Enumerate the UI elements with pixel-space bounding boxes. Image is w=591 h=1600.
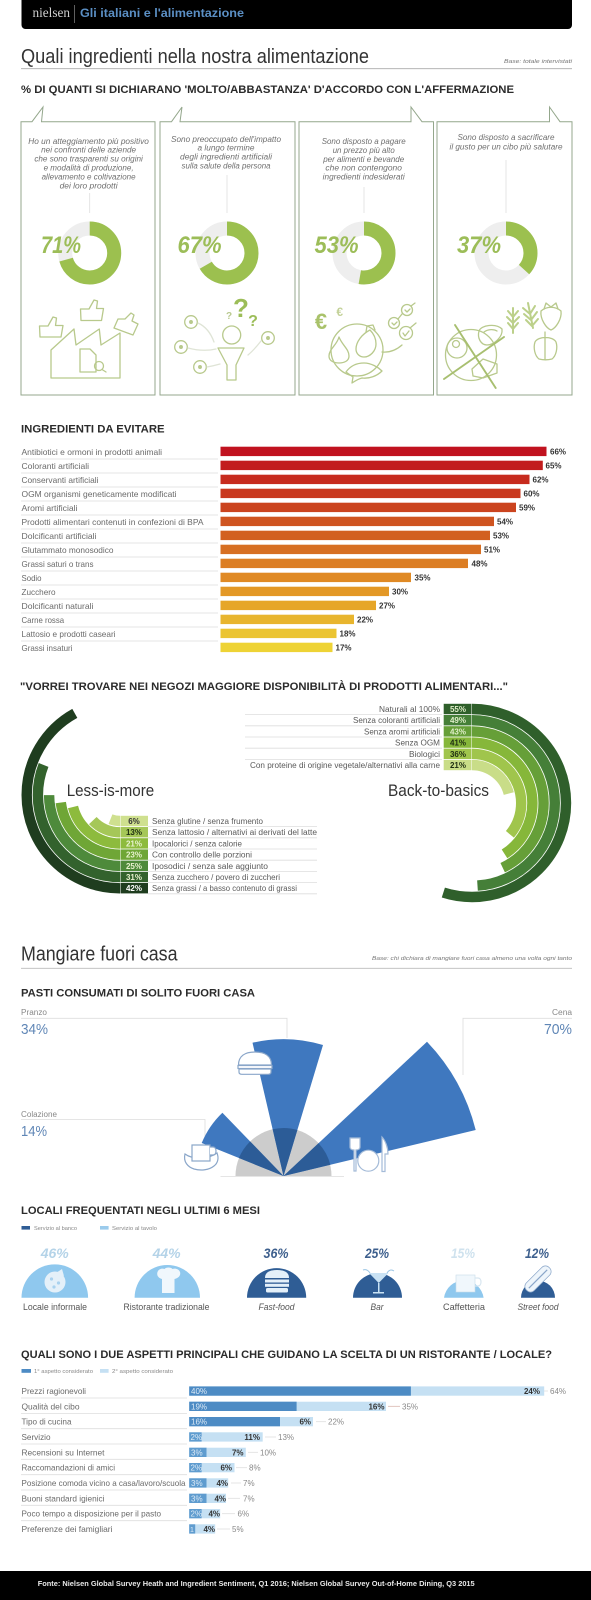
donut 53%	[314, 228, 388, 278]
bar chart: ingredients to avoid: 17%	[336, 644, 352, 652]
stacked bar chart: aspects: 16%	[368, 1402, 384, 1411]
rows: less-is-more values and labels: Senza grassi / a basso contenuto di grassi	[152, 884, 297, 893]
icon: factory with thumbs up	[40, 300, 138, 378]
icon: person with questions	[175, 316, 274, 380]
panel: worried about artificial ingredients 67%: sulla salute della persona	[182, 162, 271, 170]
stacked bar chart: aspects: 11%	[244, 1433, 260, 1442]
stacked bar chart: aspects: 7%	[243, 1494, 255, 1503]
stacked bar chart: aspects: 64%	[550, 1387, 566, 1396]
venue: ristorante tradizionale: Ristorante tradizionale	[124, 1302, 210, 1312]
bar chart: ingredients to avoid: 27%	[379, 602, 395, 610]
rows: back-to-basics values and labels: Naturali al 100%	[379, 705, 440, 714]
bar chart: ingredients to avoid: 59%	[519, 504, 535, 512]
bar chart: ingredients to avoid: Grassi saturi o trans	[22, 559, 94, 569]
rows: back-to-basics values and labels: Senza coloranti artificiali	[353, 716, 440, 725]
panel: pay higher price 53%: ingredienti indesiderati	[323, 172, 405, 182]
bar chart: ingredients to avoid: Sodio	[22, 573, 42, 583]
venue: locale informale	[22, 1245, 88, 1312]
rows: less-is-more values and labels: Ipocalorici / senza calorie	[152, 839, 243, 848]
icon: plate and cutlery	[350, 1137, 388, 1172]
venue: street food: 12%	[525, 1245, 549, 1261]
rows: back-to-basics values and labels: 36%	[450, 750, 466, 759]
stacked bar chart: aspects: Qualità del cibo	[22, 1401, 80, 1411]
callout: colazione: Colazione	[21, 1110, 58, 1119]
venue: fast-food	[247, 1245, 306, 1312]
title: eating out: Mangiare fuori casa	[21, 944, 178, 966]
bar chart: ingredients to avoid: 62%	[532, 476, 549, 484]
icon: cup	[456, 1275, 481, 1292]
stacked bar chart: aspects: Prezzi ragionevoli	[22, 1386, 86, 1396]
callout: cena: 70%	[544, 1021, 572, 1038]
panel: sacrifice taste 37%	[437, 107, 572, 395]
bar chart: ingredients to avoid: 66%	[550, 448, 566, 456]
panel: sacrifice taste 37%: il gusto per un cibo più salutare	[450, 142, 563, 152]
venue: fast-food: Fast-food	[258, 1302, 295, 1312]
callout: colazione	[21, 1110, 205, 1140]
bar chart: ingredients to avoid: 30%	[392, 588, 408, 596]
bar chart: ingredients to avoid: Prodotti alimentari contenuti in confezioni di BPA	[22, 517, 204, 527]
bar chart: ingredients to avoid: Antibiotici e ormoni in prodotti animali	[22, 447, 162, 457]
icon: crossed unhealthy food and vegetables	[444, 303, 561, 388]
panel: worried about artificial ingredients 67%: Sono preoccupato dell'impatto	[171, 135, 282, 144]
bar chart: ingredients to avoid: 22%	[357, 616, 373, 624]
stacked bar chart: aspects: 3%	[191, 1479, 203, 1488]
callout: pranzo: Pranzo	[21, 1008, 48, 1017]
stacked bar chart: aspects	[21, 1386, 566, 1534]
venue: street food: Street food	[518, 1302, 559, 1312]
stacked bar chart: aspects: 24%	[524, 1387, 540, 1396]
venue: bar: Bar	[370, 1302, 384, 1312]
stacked bar chart: aspects: Recensioni su Internet	[22, 1447, 105, 1457]
rows: back-to-basics values and labels: Senza aromi artificiali	[364, 727, 440, 736]
bar chart: ingredients to avoid: 51%	[484, 546, 500, 554]
bar chart: ingredients to avoid: Lattosio e prodotti caseari	[22, 629, 116, 639]
bar chart: ingredients to avoid: 54%	[497, 518, 513, 526]
bar chart: ingredients to avoid: Zucchero	[22, 587, 56, 597]
icon: question marks	[226, 293, 258, 330]
stacked bar chart: aspects: Tipo di cucina	[22, 1417, 72, 1427]
stacked bar chart: aspects: Posizione comoda vicino a casa/lavoro/scuola	[22, 1478, 186, 1488]
bar chart: ingredients to avoid: 65%	[546, 462, 562, 470]
donut 67%	[178, 228, 252, 278]
wedge: colazione	[202, 1113, 284, 1176]
header bar: nielsen	[32, 6, 70, 21]
icon: question marks: ?	[233, 293, 249, 323]
bar chart: ingredients to avoid	[21, 447, 566, 653]
stacked bar chart: aspects: 7%	[243, 1479, 255, 1488]
stacked bar chart: aspects: 7%	[232, 1448, 244, 1457]
venue: bar: 25%	[364, 1245, 389, 1261]
icon: burger	[238, 1052, 272, 1074]
venue: bar	[353, 1245, 402, 1312]
icon: euro signs	[315, 305, 343, 334]
stacked bar chart: aspects: 19%	[191, 1402, 207, 1411]
rings	[27, 702, 213, 888]
panel: positive attitude 71%: dei loro prodotti	[60, 182, 118, 190]
header bar	[22, 0, 572, 29]
rings	[378, 709, 566, 897]
heading: choice of restaurant: QUALI SONO I DUE ASPETTI PRINCIPALI CHE GUIDANO LA SCELTA DI UN RISTORANTE / LOCALE?	[21, 1349, 552, 1361]
radial chart: less-is-more	[27, 702, 318, 894]
icon: euro signs: €	[315, 309, 327, 334]
rows: less-is-more values and labels: 31%	[126, 873, 142, 882]
stacked bar chart: aspects: 4%	[203, 1525, 215, 1534]
rows: back-to-basics values and labels: Senza OGM	[395, 739, 440, 748]
rows: less-is-more values and labels: 25%	[126, 862, 142, 871]
venue: caffetteria: Caffetteria	[443, 1302, 485, 1312]
stacked bar chart: aspects: Poco tempo a disposizione per il pasto	[22, 1509, 161, 1519]
icon: burger	[265, 1270, 289, 1292]
panel: positive attitude 71%	[21, 107, 155, 395]
panel: pay higher price 53%	[299, 107, 434, 395]
panel: worried about artificial ingredients 67%: a lungo termine	[198, 144, 255, 152]
stacked bar chart: aspects: 6%	[220, 1464, 232, 1473]
panel: worried about artificial ingredients 67%	[160, 107, 295, 395]
stacked bar chart: aspects: 2%	[190, 1464, 202, 1473]
stacked bar chart: aspects: 3%	[191, 1448, 203, 1457]
icon: question marks: ?	[226, 311, 232, 322]
header bar: Gli italiani e l'alimentazione	[80, 6, 244, 20]
rows: less-is-more values and labels: Senza lattosio / alternativi ai derivati del latte	[152, 828, 318, 837]
bar chart: ingredients to avoid: Conservanti artificiali	[22, 475, 99, 485]
donut 37%: 37%	[457, 232, 501, 259]
legend: venues: Servizio al banco	[34, 1226, 77, 1232]
rows: less-is-more values and labels: 23%	[126, 851, 142, 860]
fan chart: meals	[185, 1039, 476, 1176]
rows: back-to-basics values and labels: Biologici	[409, 750, 440, 759]
rows: less-is-more values and labels	[120, 816, 318, 894]
stacked bar chart: aspects: 4%	[208, 1510, 220, 1519]
donut 67%: 67%	[178, 232, 222, 259]
bar chart: ingredients to avoid: Aromi artificiali	[22, 503, 78, 513]
stacked bar chart: aspects: 35%	[402, 1402, 418, 1411]
icon: euro signs: €	[336, 305, 343, 319]
stacked bar chart: aspects: 3%	[191, 1494, 203, 1503]
panel: positive attitude 71%: e modalità di produzione,	[44, 164, 134, 172]
base note: Base: chi dichiara di mangiare fuori casa almeno una volta ogni tanto	[372, 956, 572, 962]
venue: locale informale: Locale informale	[23, 1302, 87, 1312]
icon: food globe with checks	[329, 303, 416, 383]
callout: pranzo	[21, 1008, 287, 1038]
panel: pay higher price 53%: un prezzo più alto	[333, 146, 395, 155]
rows: less-is-more values and labels: Iposodici / senza sale aggiunto	[152, 862, 269, 871]
stacked bar chart: aspects: 22%	[328, 1418, 344, 1427]
callout: cena	[463, 1008, 573, 1075]
heading: ingredients to avoid: INGREDIENTI DA EVITARE	[21, 424, 165, 436]
bar chart: ingredients to avoid: Dolcificanti naturali	[22, 601, 94, 611]
bar chart: ingredients to avoid: OGM organismi geneticamente modificati	[22, 489, 177, 499]
legend: aspects	[22, 1369, 173, 1375]
rows: back-to-basics values and labels: 43%	[450, 727, 466, 736]
rows: back-to-basics values and labels	[245, 704, 472, 770]
donut 53%: 53%	[314, 232, 358, 259]
venue: ristorante tradizionale: 44%	[152, 1245, 181, 1261]
stacked bar chart: aspects: Servizio	[22, 1432, 51, 1442]
venue: locale informale: 46%	[40, 1245, 69, 1261]
stacked bar chart: aspects: 2%	[190, 1433, 202, 1442]
venue: ristorante tradizionale	[124, 1245, 210, 1312]
venue: caffetteria: 15%	[451, 1245, 475, 1261]
stacked bar chart: aspects: 8%	[249, 1464, 261, 1473]
icon: cup and croissant	[185, 1145, 218, 1170]
bar chart: ingredients to avoid: 18%	[340, 630, 356, 638]
footer: sources: Fonte: Nielsen Global Survey Heath and Ingredient Sentiment, Q1 2016; Nielsen Global Survey Out-of-Home Dining, Q3 2015	[38, 1579, 475, 1588]
venue: caffetteria	[443, 1245, 485, 1312]
stacked bar chart: aspects: 4%	[216, 1479, 228, 1488]
wedge: cena	[284, 1042, 476, 1176]
stacked bar chart: aspects: 13%	[278, 1433, 294, 1442]
wedge: pranzo	[252, 1039, 323, 1176]
panel: pay higher price 53%: che non contengono	[325, 164, 403, 172]
legend: aspects: 2° aspetto considerato	[112, 1369, 173, 1375]
rows: back-to-basics values and labels: 41%	[450, 739, 466, 748]
title: back-to-basics: Back-to-basics	[388, 781, 489, 800]
bar chart: ingredients to avoid: 60%	[524, 490, 540, 498]
title: less-is-more: Less-is-more	[67, 781, 154, 800]
bar chart: ingredients to avoid: Grassi insaturi	[22, 643, 73, 653]
bar chart: ingredients to avoid: 35%	[414, 574, 431, 582]
rows: back-to-basics values and labels: 21%	[450, 761, 466, 770]
rows: less-is-more values and labels: Senza glutine / senza frumento	[152, 817, 264, 826]
bar chart: ingredients to avoid: Dolcificanti artificiali	[22, 531, 97, 541]
donut 71%: 71%	[41, 232, 81, 259]
callout: colazione: 14%	[21, 1123, 47, 1140]
bar chart: ingredients to avoid: 53%	[493, 532, 509, 540]
panel: sacrifice taste 37%: Sono disposto a sacrificare	[458, 133, 555, 142]
stacked bar chart: aspects: 10%	[260, 1448, 276, 1457]
callout: cena: Cena	[552, 1008, 573, 1017]
base note: Base: totale intervistati	[504, 59, 573, 65]
legend: aspects: 1° aspetto considerato	[34, 1369, 93, 1375]
rows: less-is-more values and labels: 21%	[126, 839, 142, 848]
icon: pizza	[44, 1269, 66, 1292]
rows: less-is-more values and labels: Senza zucchero / povero di zuccheri	[152, 873, 280, 882]
bar chart: ingredients to avoid: Carne rossa	[22, 615, 64, 625]
bar chart: ingredients to avoid: Coloranti artificiali	[22, 461, 89, 471]
donut 37%	[457, 228, 530, 278]
panel: pay higher price 53%: per alimenti e bevande	[322, 155, 405, 164]
icon: hot dog	[523, 1264, 553, 1294]
stacked bar chart: aspects: 2%	[190, 1510, 202, 1519]
legend: venues: Servizio al tavolo	[112, 1226, 157, 1232]
rows: less-is-more values and labels: 6%	[128, 817, 140, 826]
donut 71%	[41, 228, 114, 278]
panel: positive attitude 71%: nei confronti delle aziende	[41, 146, 137, 154]
callout: pranzo: 34%	[21, 1021, 48, 1038]
stacked bar chart: aspects: 4%	[214, 1494, 226, 1503]
stacked bar chart: aspects: Buoni standard igienici	[22, 1493, 105, 1503]
bar chart: ingredients to avoid: 48%	[472, 560, 488, 568]
icon: question marks: ?	[248, 313, 258, 330]
heading: meals out: PASTI CONSUMATI DI SOLITO FUORI CASA	[21, 988, 255, 1000]
footer: sources	[0, 1571, 591, 1600]
rows: back-to-basics values and labels: Con proteine di origine vegetale/alternativi alla carne	[250, 761, 441, 770]
stacked bar chart: aspects: 1	[190, 1527, 194, 1534]
title: ingredients: Quali ingredienti nella nostra alimentazione	[21, 46, 369, 68]
bar chart: ingredients to avoid: Glutammato monosodico	[22, 545, 114, 555]
stacked bar chart: aspects: 6%	[238, 1510, 249, 1519]
rows: less-is-more values and labels: Con controllo delle porzioni	[152, 851, 252, 860]
heading: availability wish: "VORREI TROVARE NEI NEGOZI MAGGIORE DISPONIBILITÀ DI PRODOTTI ALIMENTARI..."	[20, 680, 508, 693]
icon: chef hat	[157, 1268, 180, 1293]
stacked bar chart: aspects: 5%	[232, 1525, 244, 1534]
stacked bar chart: aspects: 6%	[299, 1418, 311, 1427]
stacked bar chart: aspects: 40%	[191, 1387, 207, 1396]
rows: less-is-more values and labels: 42%	[126, 884, 142, 893]
panel: worried about artificial ingredients 67%: degli ingredienti artificiali	[180, 152, 272, 162]
venue: street food	[518, 1245, 559, 1312]
panel: positive attitude 71%: allevamento e coltivazione	[42, 172, 136, 182]
radial chart: back-to-basics	[245, 704, 566, 897]
rows: back-to-basics values and labels: 49%	[450, 716, 466, 725]
legend: venues	[22, 1226, 157, 1232]
panel: positive attitude 71%: che sono trasparenti su origini	[34, 154, 143, 164]
stacked bar chart: aspects: Preferenze dei famigliari	[22, 1524, 113, 1534]
panel: pay higher price 53%: Sono disposto a pagare	[322, 137, 406, 146]
stacked bar chart: aspects: 16%	[191, 1418, 207, 1427]
venue: fast-food: 36%	[264, 1245, 289, 1261]
icon: cocktail glass	[363, 1270, 394, 1294]
rows: back-to-basics values and labels: 55%	[450, 705, 466, 714]
heading: agreement: % DI QUANTI SI DICHIARANO 'MOLTO/ABBASTANZA' D'ACCORDO CON L'AFFERMAZIONE	[21, 84, 514, 96]
panel: positive attitude 71%: Ho un atteggiamento più positivo	[28, 137, 149, 146]
stacked bar chart: aspects: Raccomandazioni di amici	[22, 1463, 115, 1473]
heading: venues: LOCALI FREQUENTATI NEGLI ULTIMI 6 MESI	[21, 1205, 260, 1217]
rows: less-is-more values and labels: 13%	[126, 828, 142, 837]
